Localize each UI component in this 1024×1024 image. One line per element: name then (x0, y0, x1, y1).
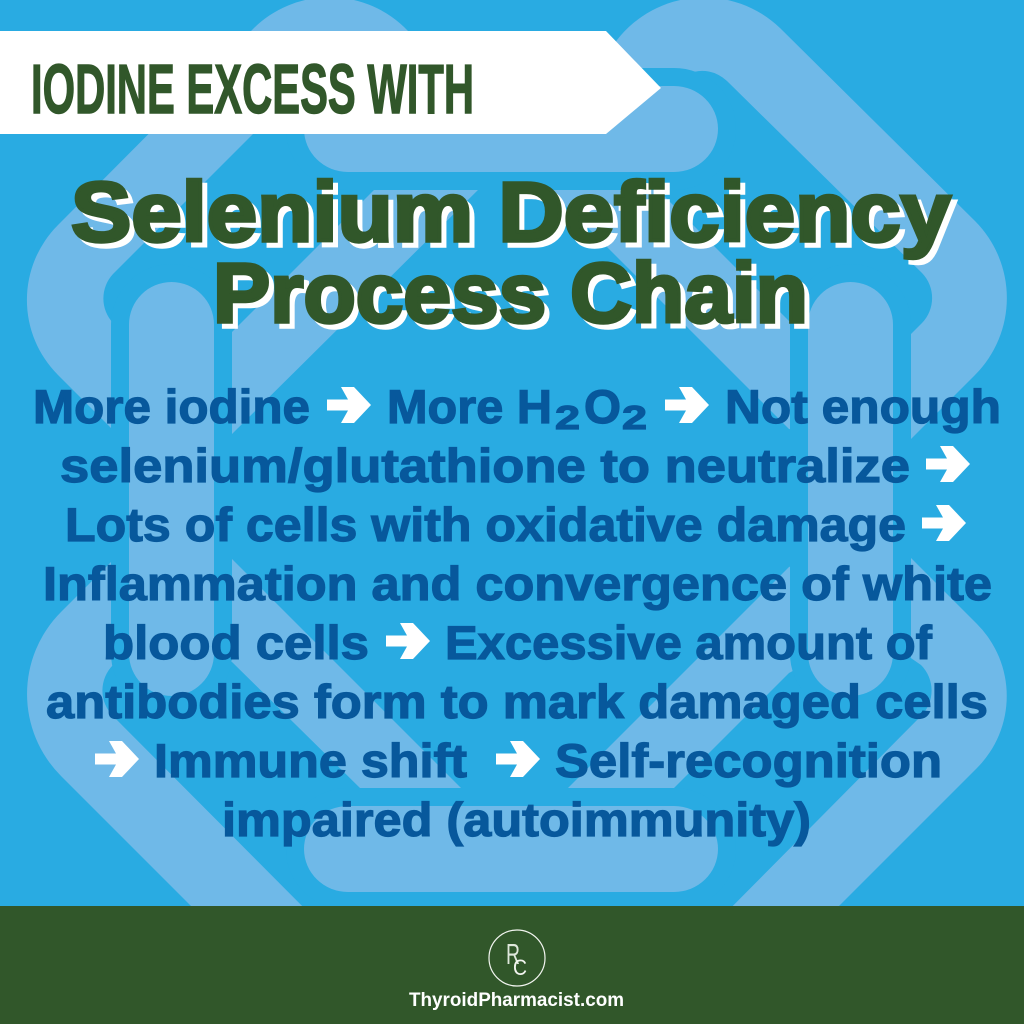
step text: immune shift: Immune shift (154, 734, 467, 787)
step text: antibodies: antibodies form to mark damaged cells (46, 675, 988, 728)
step text: impaired autoimmunity: impaired (autoimmunity) (222, 793, 811, 846)
main title (71, 165, 956, 345)
chain link: upper left (27, 0, 480, 457)
step text: more H2O2: 2 (555, 399, 580, 436)
logo: RC monogram: C (513, 955, 527, 980)
arrow (922, 505, 966, 541)
title line 1 shadow: Selenium Deficiency (76, 170, 956, 264)
arrow (386, 623, 430, 659)
step text: excessive amount: Excessive amount of (445, 616, 932, 669)
chain link: bottom pill (304, 806, 718, 892)
step text: blood cells: blood cells (103, 616, 369, 669)
logo: RC monogram: R (506, 939, 520, 971)
step text: inflammation: Inflammation and convergence of white (43, 557, 992, 610)
banner heading: IODINE EXCESS WITH (31, 50, 474, 128)
website: ThyroidPharmacist.com (409, 990, 624, 1011)
chain link: right pill (808, 282, 893, 696)
step text: not enough: Not enough (725, 380, 1001, 433)
step text: self-recognition: Self-recognition (555, 734, 942, 787)
step text: oxidative damage: Lots of cells with oxidative damage (65, 498, 906, 551)
step text: more iodine: More iodine (33, 380, 310, 433)
title line 1: Selenium Deficiency (71, 165, 951, 259)
chain link: lower left (27, 520, 500, 1015)
chain link: left pill (129, 282, 214, 696)
arrow (496, 741, 540, 777)
step text: selenium glutathione: selenium/glutathione to neutralize (60, 439, 910, 492)
footer (0, 906, 1024, 1024)
step text: more H2O2: 2 (622, 399, 647, 436)
step text: more H2O2: O (584, 380, 621, 433)
logo: RC monogram (489, 930, 545, 986)
chain link: top pill (304, 86, 718, 172)
banner (0, 31, 661, 134)
chain link: upper right (550, 0, 1007, 450)
arrow (926, 446, 970, 482)
step text: more H2O2: More H (387, 380, 552, 433)
title line 2 shadow: Process Chain (218, 251, 813, 345)
footer band (0, 906, 1024, 1024)
arrow (327, 387, 371, 423)
arrow (665, 387, 709, 423)
chain link: lower right (520, 537, 1007, 1015)
banner shape (0, 31, 661, 134)
title line 2: Process Chain (213, 246, 808, 340)
process chain text (33, 380, 1001, 846)
arrow (95, 741, 139, 777)
